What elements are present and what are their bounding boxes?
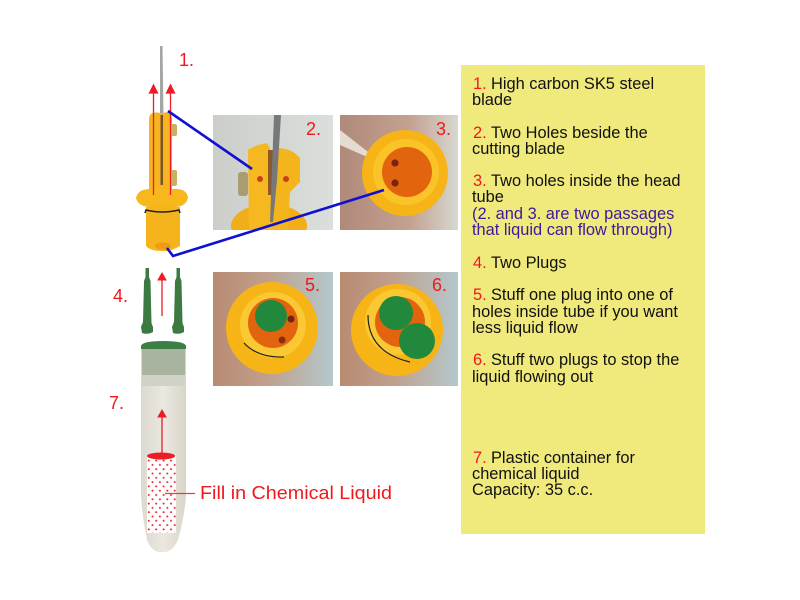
arrows: flow through head xyxy=(150,85,174,195)
label: 4: 4. xyxy=(113,286,128,306)
text: item 3: (2. and 3. are two passages xyxy=(472,205,674,223)
text: item 5: less liquid flow xyxy=(472,319,578,337)
text: item 3: tube xyxy=(472,188,504,206)
icon: left plug xyxy=(141,268,153,334)
icon: blade and yellow head xyxy=(136,46,188,251)
photo 5: one plug inserted xyxy=(213,272,333,386)
label: 1: 1. xyxy=(179,50,194,70)
text: item 5: 5. xyxy=(473,286,487,304)
text: item 2: 2. xyxy=(473,124,487,142)
text: item 1: blade xyxy=(472,91,512,109)
arrow: plugs into head xyxy=(158,273,166,316)
label: 6: 6. xyxy=(432,275,447,295)
liquid fill area xyxy=(147,452,176,533)
photo 6: two plugs inserted xyxy=(340,272,458,386)
text: item 3: 3. xyxy=(473,172,487,190)
callout line: blade to photo 2 xyxy=(168,111,252,169)
text: item 4: 4. xyxy=(473,254,487,272)
photo 3: holes inside head tube xyxy=(340,115,458,230)
text: item 6: liquid flowing out xyxy=(472,368,594,386)
label: 2: 2. xyxy=(306,119,321,139)
label: 3: 3. xyxy=(436,119,451,139)
label: fill in chemical liquid: Fill in Chemical Liquid xyxy=(200,482,392,503)
arrow: liquid fill direction xyxy=(158,410,166,456)
text: item 3: that liquid can flow through) xyxy=(472,221,672,239)
text: item 3: Two holes inside the head xyxy=(491,172,681,190)
label: 7: 7. xyxy=(109,393,124,413)
text: item 2: cutting blade xyxy=(472,140,565,158)
photo 2: holes beside blade xyxy=(213,115,333,230)
text: item 7: Plastic container for xyxy=(491,449,635,467)
text: item 7: Capacity: 35 c.c. xyxy=(472,481,593,499)
text: item 7: 7. xyxy=(473,449,487,467)
callout line: head tube to photo 3 xyxy=(167,190,384,256)
text: item 6: 6. xyxy=(473,351,487,369)
text: item 1: High carbon SK5 steel xyxy=(491,75,654,93)
text: item 2: Two Holes beside the xyxy=(491,124,648,142)
label: 5: 5. xyxy=(305,275,320,295)
icon: right plug xyxy=(172,268,184,334)
text: item 5: Stuff one plug into one of xyxy=(491,286,673,304)
text: item 1: 1. xyxy=(473,75,487,93)
text: item 4: Two Plugs xyxy=(491,254,567,272)
text: item 7: chemical liquid xyxy=(472,465,580,483)
leader line: liquid label xyxy=(165,492,195,494)
text: item 6: Stuff two plugs to stop the xyxy=(491,351,679,369)
panel: feature descriptions xyxy=(461,65,705,534)
icon: plastic container xyxy=(141,341,186,552)
text: item 5: holes inside tube if you want xyxy=(472,303,678,321)
